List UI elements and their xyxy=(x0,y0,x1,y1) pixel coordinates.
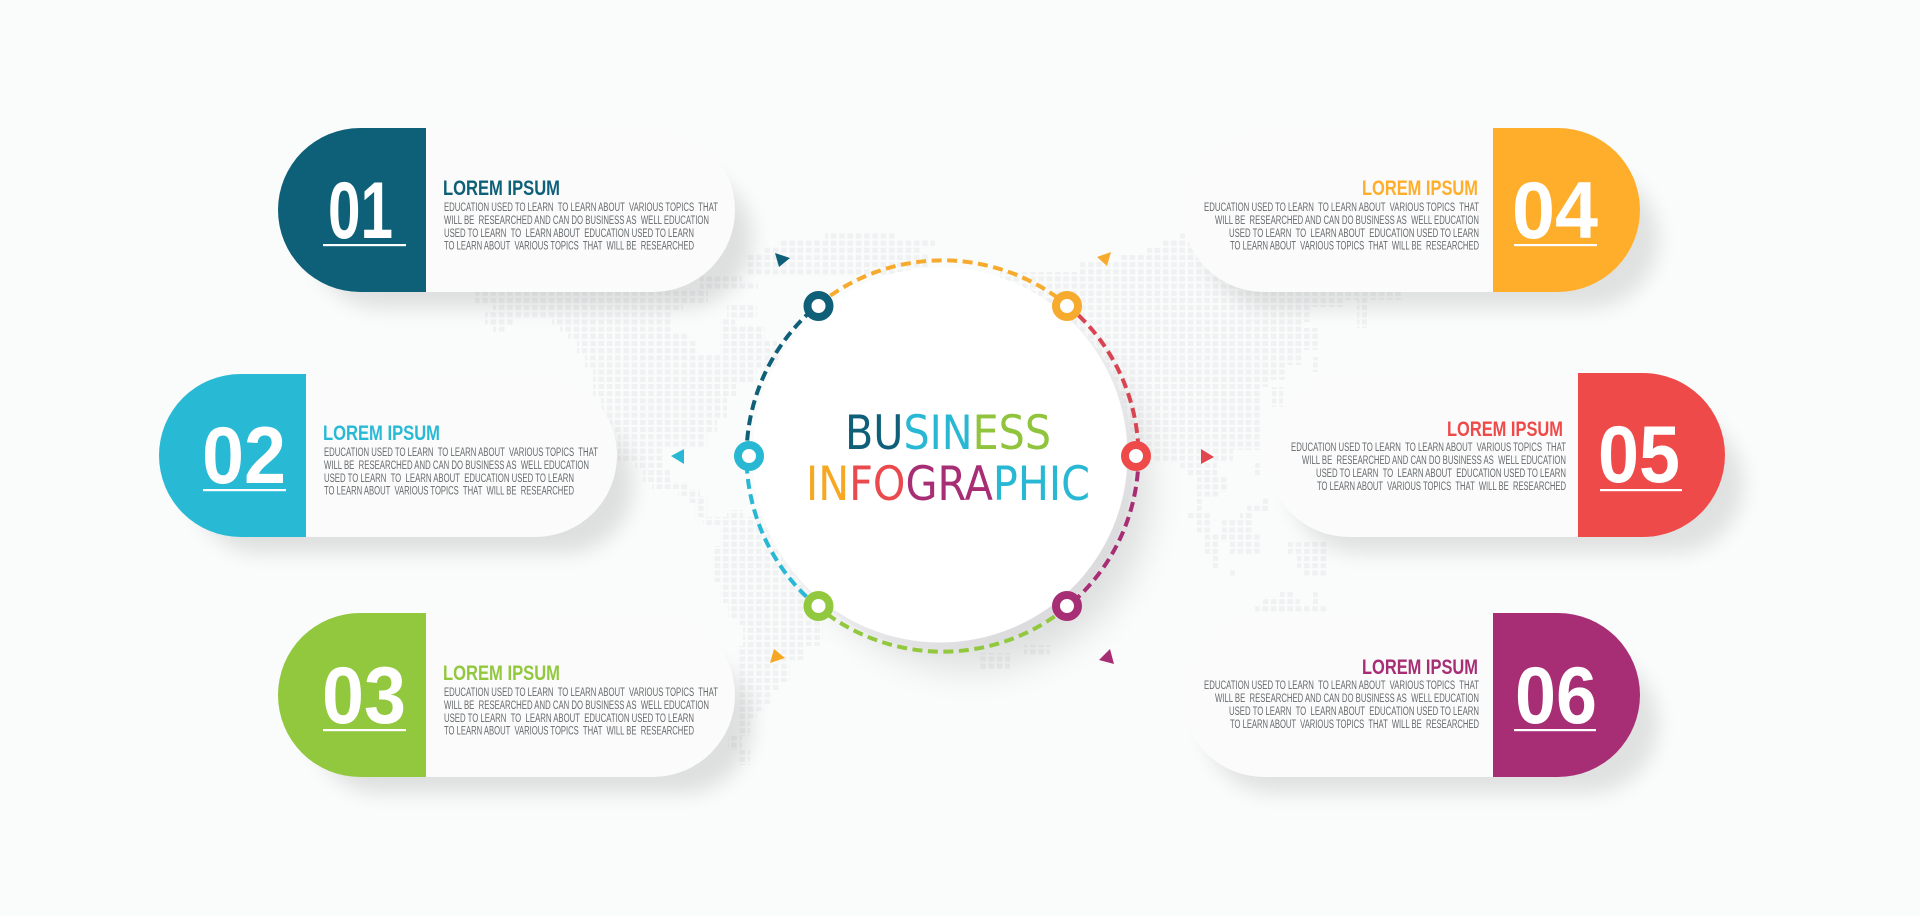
heading: LOREM IPSUM xyxy=(443,661,560,685)
number: 02 xyxy=(202,411,286,501)
node 03 xyxy=(808,595,830,617)
node 05 xyxy=(1125,445,1147,467)
line 1: EDUCATION USED TO LEARN TO LEARN ABOUT VARIOUS TOPICS THAT xyxy=(1204,680,1479,692)
line 2: WILL BE RESEARCHED AND CAN DO BUSINESS AS WELL EDUCATION xyxy=(1215,693,1479,705)
underline xyxy=(323,729,406,731)
number tab xyxy=(1493,613,1640,777)
arc cyan xyxy=(746,456,818,607)
arrow cyan xyxy=(671,449,684,464)
number: 03 xyxy=(322,651,406,741)
panel: 04 xyxy=(1182,128,1658,308)
card shadow xyxy=(193,416,633,553)
underline xyxy=(1514,729,1596,731)
panel: central circle xyxy=(752,268,1150,670)
number tab xyxy=(278,128,426,292)
line 4: TO LEARN ABOUT VARIOUS TOPICS THAT WILL BE RESEARCHED xyxy=(1230,240,1479,252)
line 2: WILL BE RESEARCHED AND CAN DO BUSINESS AS WELL EDUCATION xyxy=(1302,455,1566,467)
underline xyxy=(323,244,406,246)
panel: 05 xyxy=(1267,373,1743,553)
line 3: USED TO LEARN TO LEARN ABOUT EDUCATION USED TO LEARN xyxy=(1229,706,1479,718)
card body xyxy=(278,613,735,777)
number tab xyxy=(1493,128,1640,292)
number tab xyxy=(159,374,306,537)
number tab xyxy=(1578,373,1725,537)
line 4: TO LEARN ABOUT VARIOUS TOPICS THAT WILL BE RESEARCHED xyxy=(444,240,694,252)
line 3: USED TO LEARN TO LEARN ABOUT EDUCATION USED TO LEARN xyxy=(324,473,574,485)
heading: LOREM IPSUM xyxy=(443,176,560,200)
underline xyxy=(1514,244,1597,246)
body text xyxy=(1291,442,1566,493)
number tab xyxy=(278,613,426,777)
body text xyxy=(1204,680,1479,731)
body text xyxy=(324,447,598,498)
underline xyxy=(1600,489,1682,491)
arc green xyxy=(818,607,1067,652)
card shadow xyxy=(312,170,752,308)
body text xyxy=(444,687,718,738)
line 3: USED TO LEARN TO LEARN ABOUT EDUCATION USED TO LEARN xyxy=(1316,468,1566,480)
dotted world map xyxy=(475,232,1410,765)
line 1: EDUCATION USED TO LEARN TO LEARN ABOUT VARIOUS TOPICS THAT xyxy=(1204,202,1479,214)
number: 04 xyxy=(1512,166,1598,256)
node 04 xyxy=(1056,295,1078,317)
arrow orange top xyxy=(1097,252,1111,266)
card body xyxy=(159,374,617,537)
card body xyxy=(1182,128,1640,292)
title line 1: BUSINESS xyxy=(845,406,1051,461)
heading: LOREM IPSUM xyxy=(1447,417,1563,441)
body text xyxy=(444,202,718,252)
heading: LOREM IPSUM xyxy=(1362,176,1478,200)
arrow red xyxy=(1201,449,1214,464)
card shadow xyxy=(1205,170,1658,308)
node 06 xyxy=(1056,595,1078,617)
number: 06 xyxy=(1515,651,1597,741)
dashed ring with nodes xyxy=(746,260,1138,652)
arrow purple xyxy=(1099,649,1114,664)
line 3: USED TO LEARN TO LEARN ABOUT EDUCATION USED TO LEARN xyxy=(1229,228,1479,240)
ring nodes xyxy=(738,295,1147,617)
body text xyxy=(1204,202,1479,252)
line 4: TO LEARN ABOUT VARIOUS TOPICS THAT WILL BE RESEARCHED xyxy=(1230,719,1479,731)
card body xyxy=(1182,613,1640,777)
arrow orange bottom xyxy=(770,649,785,663)
card body xyxy=(278,128,735,292)
white disc xyxy=(752,268,1128,642)
arc orange xyxy=(818,260,1067,305)
arc red xyxy=(1067,305,1138,456)
heading: LOREM IPSUM xyxy=(1362,655,1478,679)
line 1: EDUCATION USED TO LEARN TO LEARN ABOUT VARIOUS TOPICS THAT xyxy=(444,687,718,699)
line 1: EDUCATION USED TO LEARN TO LEARN ABOUT VARIOUS TOPICS THAT xyxy=(444,202,718,214)
line 2: WILL BE RESEARCHED AND CAN DO BUSINESS AS WELL EDUCATION xyxy=(444,700,709,712)
title line 2: INFOGRAPHIC xyxy=(806,457,1090,512)
line 4: TO LEARN ABOUT VARIOUS TOPICS THAT WILL BE RESEARCHED xyxy=(324,486,574,498)
number: 01 xyxy=(328,166,393,256)
underline xyxy=(203,489,286,491)
line 3: USED TO LEARN TO LEARN ABOUT EDUCATION USED TO LEARN xyxy=(444,713,694,725)
panel: 06 xyxy=(1182,613,1658,793)
node 01 xyxy=(808,295,830,317)
heading: LOREM IPSUM xyxy=(323,421,440,445)
circle grey rim xyxy=(755,271,1133,649)
arrow teal xyxy=(775,253,790,267)
line 1: EDUCATION USED TO LEARN TO LEARN ABOUT VARIOUS TOPICS THAT xyxy=(1291,442,1566,454)
panel: 02 xyxy=(159,374,633,553)
card shadow xyxy=(1205,655,1658,793)
line 2: WILL BE RESEARCHED AND CAN DO BUSINESS AS WELL EDUCATION xyxy=(1215,215,1479,227)
arc teal xyxy=(746,305,818,456)
circle drop shadow xyxy=(794,314,1150,670)
arc purple xyxy=(1067,456,1138,607)
card shadow xyxy=(1290,415,1743,553)
node 02 xyxy=(738,445,760,467)
line 1: EDUCATION USED TO LEARN TO LEARN ABOUT VARIOUS TOPICS THAT xyxy=(324,447,598,459)
line 3: USED TO LEARN TO LEARN ABOUT EDUCATION USED TO LEARN xyxy=(444,228,694,240)
line 4: TO LEARN ABOUT VARIOUS TOPICS THAT WILL BE RESEARCHED xyxy=(444,726,694,738)
number: 05 xyxy=(1598,410,1680,500)
panel: 01 xyxy=(278,128,752,308)
card body xyxy=(1267,373,1725,537)
panel: 03 xyxy=(278,613,752,793)
card shadow xyxy=(312,655,752,793)
line 2: WILL BE RESEARCHED AND CAN DO BUSINESS AS WELL EDUCATION xyxy=(324,460,589,472)
title: BUSINESS INFOGRAPHIC xyxy=(806,406,1090,512)
line 4: TO LEARN ABOUT VARIOUS TOPICS THAT WILL BE RESEARCHED xyxy=(1317,481,1566,493)
line 2: WILL BE RESEARCHED AND CAN DO BUSINESS AS WELL EDUCATION xyxy=(444,215,709,227)
